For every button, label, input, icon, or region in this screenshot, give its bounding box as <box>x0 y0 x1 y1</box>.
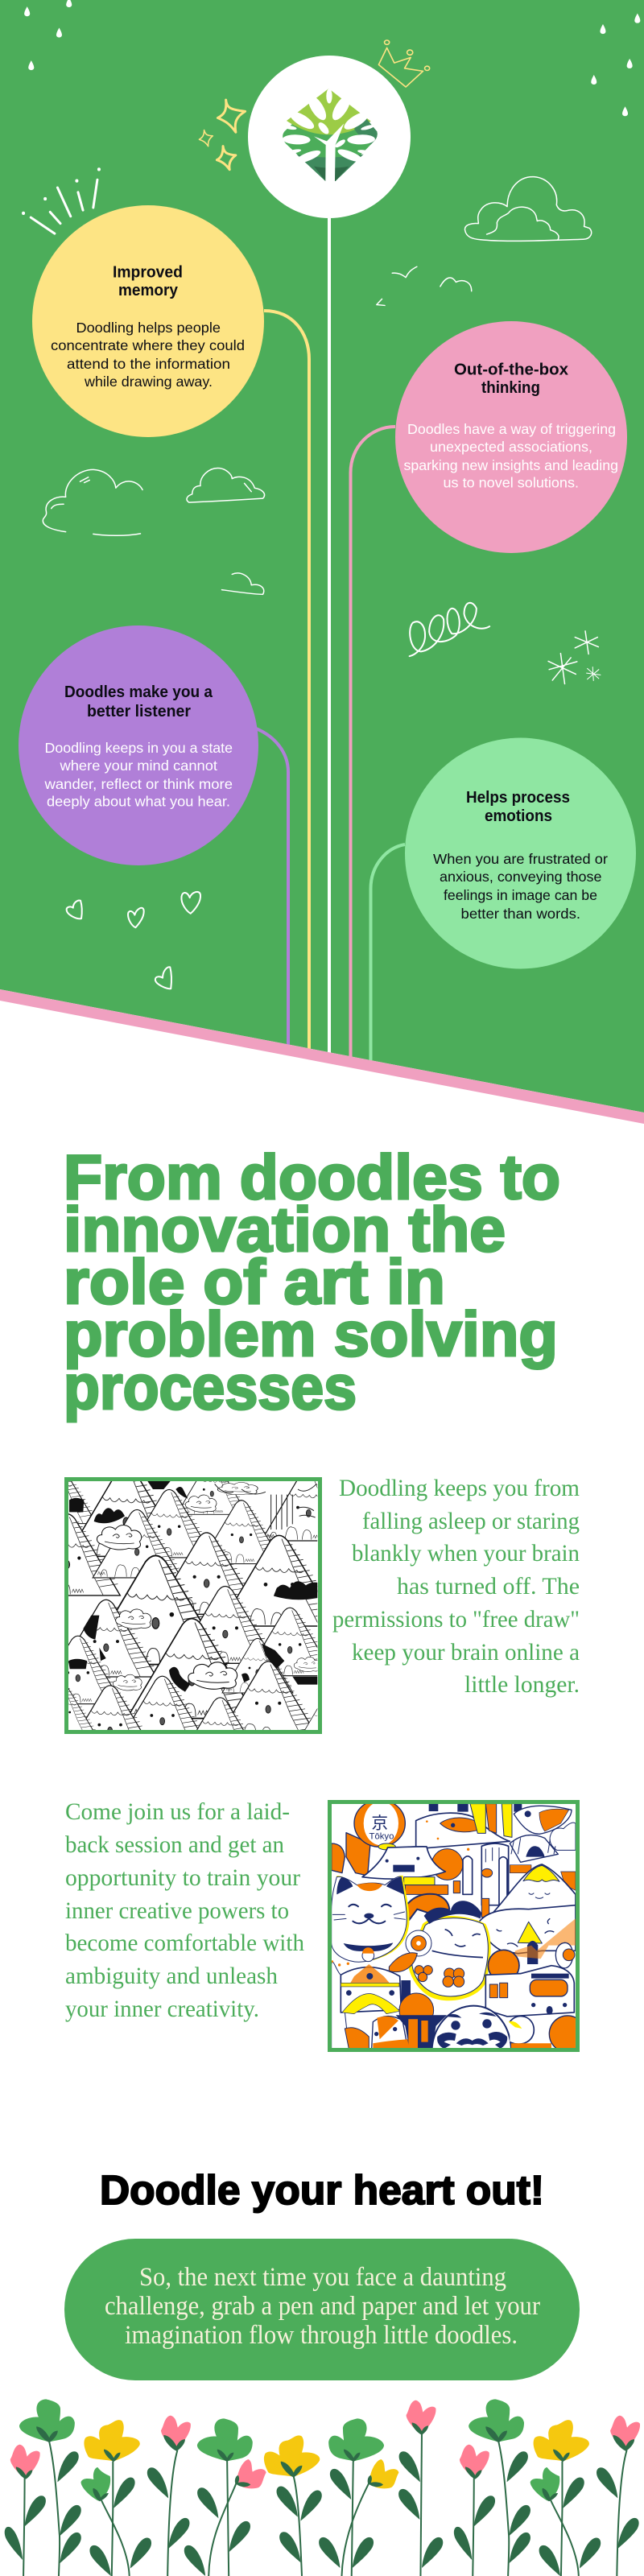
heading: helps process emotions <box>466 789 570 825</box>
doodle: birds <box>377 266 472 305</box>
image: colourful Tokyo doodle pattern: Tōkyo <box>369 1832 394 1842</box>
title: problem solving <box>64 1298 558 1369</box>
illustration: row of flowers <box>5 2399 640 2576</box>
flower: green with side bud <box>184 2418 266 2576</box>
image: colourful Tokyo doodle pattern <box>328 1800 586 2052</box>
callout text: challenge, grab a pen and paper and let your <box>105 2292 540 2321</box>
text: come join us: opportunity to train your <box>65 1864 300 1891</box>
image: colourful Tokyo doodle pattern: 京 <box>371 1814 388 1833</box>
text: doodling keeps you from falling asleep: keep your brain online a <box>352 1639 580 1666</box>
panel: out-of-the-box thinking <box>395 321 627 553</box>
text: improved memory body: concentrate where they could <box>51 337 245 353</box>
text: come join us: back session and get an <box>65 1831 284 1858</box>
text: improved memory body: attend to the information <box>67 356 230 372</box>
doodle: raindrops <box>25 0 640 116</box>
panel: improved memory <box>32 205 264 437</box>
text: doodling keeps you from falling asleep: Doodling keeps you from <box>339 1475 580 1501</box>
connector lines <box>256 218 405 1066</box>
text: helps process emotions body: better than words. <box>460 906 580 922</box>
text: doodling keeps you from falling asleep <box>332 1475 580 1698</box>
callout text: imagination flow through little doodles. <box>125 2321 518 2350</box>
text: out-of-the-box body <box>404 421 618 491</box>
text: helps process emotions body: anxious, conveying those <box>440 869 602 885</box>
text: better listener body: deeply about what you hear. <box>47 794 230 810</box>
doodle: burst lines <box>23 169 99 233</box>
text: better listener body: wander, reflect or think more <box>43 776 233 792</box>
text: out-of-the-box body: unexpected associations, <box>430 439 592 455</box>
heading: better listener: better listener <box>87 703 191 720</box>
text: improved memory body: Doodling helps people <box>76 320 221 336</box>
text: better listener body: Doodling keeps in you a state <box>45 740 233 756</box>
heading: helps process emotions: Helps process <box>466 789 570 807</box>
heading: helps process emotions: emotions <box>485 807 552 825</box>
panel: helps process emotions <box>405 737 636 969</box>
doodle: sparkles <box>199 100 246 170</box>
text: helps process emotions body: When you are frustrated or <box>433 851 608 867</box>
heading: doodle your heart out: Doodle your heart out! <box>100 2167 544 2213</box>
heading: better listener <box>64 683 213 720</box>
image: mountain doodle pattern <box>64 1477 322 1734</box>
logo: white circle with tree <box>248 56 411 218</box>
heading: out-of-the-box thinking: Out-of-the-box <box>454 361 568 378</box>
doodle: hearts <box>67 892 200 989</box>
text: doodling keeps you from falling asleep: little longer. <box>464 1671 580 1698</box>
title: role of art in <box>64 1246 445 1317</box>
text: better listener body: where your mind cannot <box>59 758 217 774</box>
doodle: asterisks <box>548 631 601 684</box>
title <box>64 1141 560 1422</box>
title: innovation the <box>64 1194 506 1265</box>
callout: green pill <box>64 2239 580 2380</box>
text: out-of-the-box body: us to novel solutions. <box>443 475 579 491</box>
text: come join us: become comfortable with <box>65 1930 304 1956</box>
text: helps process emotions body: feelings in image can be <box>444 887 597 903</box>
doodle: cloud top right <box>464 177 592 241</box>
heading: out-of-the-box thinking <box>454 361 568 397</box>
text: come join us: Come join us for a laid- <box>65 1798 290 1825</box>
text: come join us: inner creative powers to <box>65 1897 289 1924</box>
text: out-of-the-box body: Doodles have a way of triggering <box>407 421 616 437</box>
text: doodling keeps you from falling asleep: permissions to "free draw" <box>332 1606 580 1633</box>
text: out-of-the-box body: sparking new insights and leading <box>404 457 618 473</box>
text: doodling keeps you from falling asleep: has turned off. The <box>397 1573 580 1600</box>
text: helps process emotions body <box>433 851 608 922</box>
heading: better listener: Doodles make you a <box>64 683 213 701</box>
panel: better listener <box>19 625 258 865</box>
doodle: scribble loops <box>410 603 489 656</box>
pink diagonal divider <box>0 989 644 1124</box>
heading: out-of-the-box thinking: thinking <box>481 379 540 397</box>
title: From doodles to <box>64 1141 560 1212</box>
doodle: tiny cloud <box>222 573 264 594</box>
text: doodling keeps you from falling asleep: blankly when your brain <box>352 1540 580 1567</box>
text: come join us: ambiguity and unleash <box>65 1963 278 1989</box>
text: better listener body <box>43 740 233 810</box>
heading: improved memory: Improved <box>113 264 183 282</box>
green header panel <box>0 0 644 1113</box>
heading: improved memory: memory <box>118 282 179 299</box>
text: improved memory body <box>51 320 245 390</box>
flower: yellow centre <box>264 2435 322 2576</box>
flower: green mirrored with side bud <box>319 2418 398 2576</box>
doodle: cloud lower left <box>43 469 142 535</box>
title: processes <box>64 1352 357 1422</box>
doodle: small cloud <box>187 469 265 502</box>
text: doodling keeps you from falling asleep: falling asleep or staring <box>362 1508 580 1534</box>
heading: improved memory <box>113 264 183 299</box>
flower: large green <box>19 2399 81 2576</box>
flower: pink <box>5 2445 46 2576</box>
flower: pink tall <box>147 2416 191 2576</box>
text: improved memory body: while drawing away. <box>84 374 213 390</box>
text: come join us: your inner creativity. <box>65 1996 259 2022</box>
callout text: So, the next time you face a daunting <box>139 2263 506 2292</box>
text: come join us <box>65 1798 304 2022</box>
doodle: crown <box>378 40 430 87</box>
flower: small green <box>81 2467 151 2576</box>
flower: yellow <box>84 2420 140 2576</box>
flowers: repeated set <box>454 2399 640 2576</box>
flower: pink tallest <box>398 2401 443 2576</box>
callout text <box>105 2263 540 2350</box>
